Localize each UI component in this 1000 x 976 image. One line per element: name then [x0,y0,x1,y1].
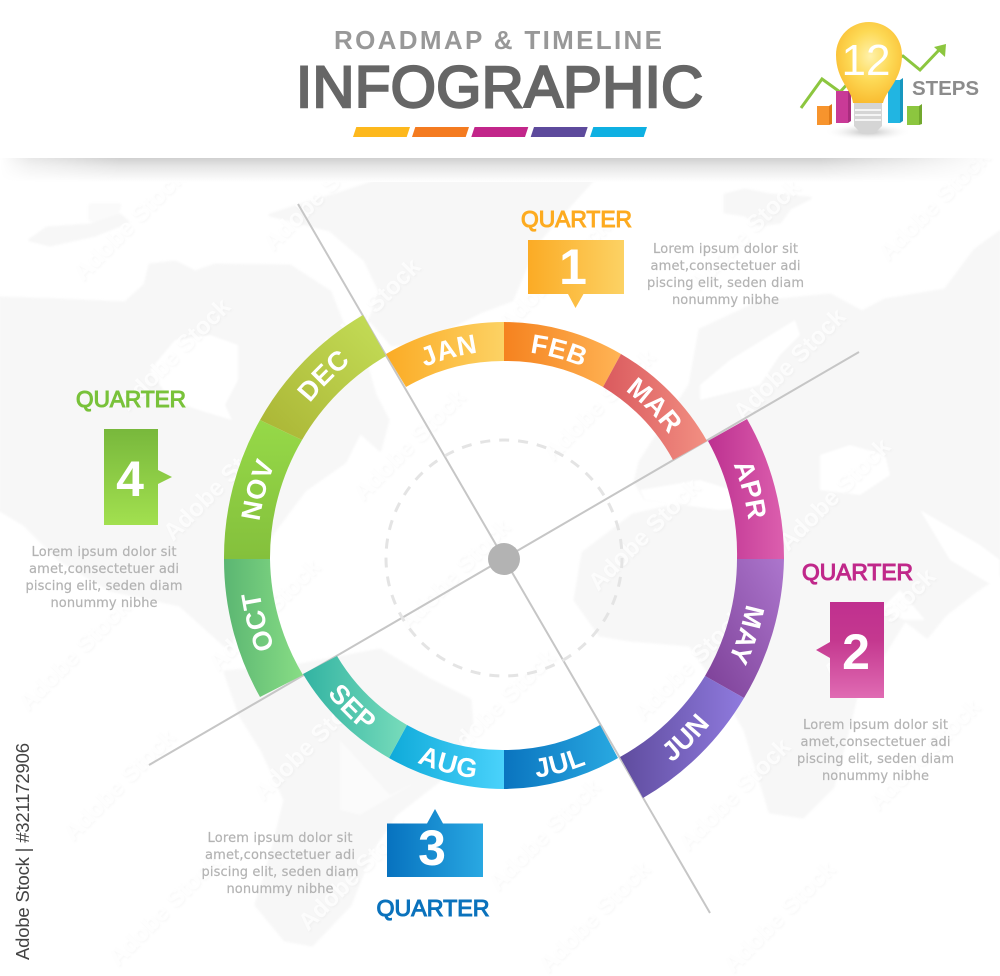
description: Lorem ipsum dolor sit [208,831,352,846]
number card [104,429,172,525]
stock watermarks: Adobe Stock [728,303,852,426]
SEP segment [303,656,407,758]
main title: INFOGRAPHIC [296,55,703,120]
world map background [0,171,1000,945]
icon: 12 steps light bulb: 12 [842,36,890,85]
stock watermarks: Adobe Stock [393,513,517,636]
stock watermarks: Adobe Stock [258,133,382,256]
APR segment: APR [734,464,766,520]
AUG segment [389,725,504,789]
description: nonummy nibhe [226,882,334,897]
SEP segment: SEP [330,685,375,724]
MAY segment: MAY [731,606,764,666]
number card [387,809,483,877]
stock watermarks: Adobe Stock [583,473,707,596]
description: amet,consectetuer adi [205,848,355,863]
stock watermarks: Adobe Stock [818,563,942,686]
JAN segment: JAN [423,334,476,366]
AUG segment: AUG [418,748,476,778]
JUN segment: JUN [664,713,710,760]
axis lines [149,204,859,913]
description: piscing elit, seden diam [797,752,954,767]
ring quarter 4 [224,315,386,697]
JUL segment: JUL [536,750,586,777]
colour bars [353,127,647,137]
heading: QUARTER [376,895,490,921]
description: nonummy nibhe [50,596,158,611]
FEB segment: FEB [532,334,586,364]
stock watermarks: Adobe Stock [203,553,327,676]
MAR segment [603,354,707,460]
number card: 2 [842,624,870,680]
description: Lorem ipsum dolor sit [32,545,176,560]
stock watermarks: Adobe Stock [158,423,282,546]
panel: quarter 2 [797,559,954,784]
stock watermarks: Adobe Stock [348,383,472,506]
NOV segment [224,420,302,559]
description [797,718,954,784]
panel: quarter 3 [202,809,490,921]
stock watermarks: Adobe Stock [863,693,987,816]
stock watermarks: Adobe Stock [303,253,427,376]
stock watermarks: Adobe Stock [438,643,562,766]
subtitle: ROADMAP & TIMELINE [334,25,662,55]
stock watermarks: Adobe Stock [718,855,842,976]
ring quarter 2 [620,419,784,798]
stock watermarks: Adobe Stock [538,343,662,466]
stock watermarks: Adobe Stock [683,173,807,296]
description: Lorem ipsum dolor sit [803,718,948,733]
MAR segment: MAR [626,377,680,434]
header panel [0,0,1000,158]
description: amet,consectetuer adi [650,259,800,274]
heading: QUARTER [521,206,632,232]
stock watermarks: Adobe Stock [113,293,237,416]
stock watermarks: Adobe Stock [103,848,227,971]
number card [816,602,884,698]
MAY segment [705,559,784,698]
ring quarter 1 [386,322,707,460]
stock watermarks: Adobe Stock [673,733,797,856]
centre dot [488,543,520,575]
stock watermarks: Adobe Stock [68,163,192,286]
number card: 4 [116,451,144,507]
stock watermarks: Adobe Stock [13,593,137,716]
map water cut-outs [60,170,1000,815]
stock watermarks: Adobe Stock [248,683,372,806]
description [647,242,804,308]
description: amet,consectetuer adi [800,735,950,750]
OCT segment [224,559,303,697]
DEC segment [260,315,386,440]
number card: 1 [559,239,587,295]
description: nonummy nibhe [672,293,779,308]
OCT segment: OCT [241,594,272,650]
DEC segment: DEC [296,351,348,402]
description: piscing elit, seden diam [26,579,182,594]
stock watermarks: Adobe Stock [483,773,607,896]
heading: QUARTER [802,559,913,585]
description [26,545,182,611]
description: piscing elit, seden diam [202,865,358,880]
NOV segment: NOV [241,458,272,520]
number card [528,239,624,308]
heading: QUARTER [76,386,186,412]
stock watermarks: Adobe Stock [773,433,897,556]
stock watermarks: Adobe Stock [493,213,617,336]
description: Lorem ipsum dolor sit [653,242,798,257]
number card: 3 [418,820,446,876]
stock watermarks: Adobe Stock [533,855,657,976]
FEB segment [504,322,621,387]
JAN segment [386,322,504,387]
JUL segment [504,725,618,789]
description [202,831,358,897]
stock watermarks: Adobe Stock [293,813,417,936]
icon: 12 steps light bulb: STEPS [912,77,979,100]
icon: 12 steps light bulb [801,22,979,141]
stock id side label: Adobe Stock | #321172906 [12,743,33,960]
panel: quarter 1 [521,206,804,308]
JUN segment [620,676,744,798]
dashed inner circle [386,440,622,676]
ring quarter 3 [303,656,618,789]
stock watermarks: Adobe Stock [628,603,752,726]
header band shadow [12,158,958,177]
stock watermarks: Adobe Stock [873,143,997,266]
stock watermarks: Adobe Stock [58,723,182,846]
description: nonummy nibhe [822,769,929,784]
description: amet,consectetuer adi [29,562,179,577]
APR segment [708,419,784,559]
description: piscing elit, seden diam [647,276,804,291]
panel: quarter 4 [26,386,186,611]
